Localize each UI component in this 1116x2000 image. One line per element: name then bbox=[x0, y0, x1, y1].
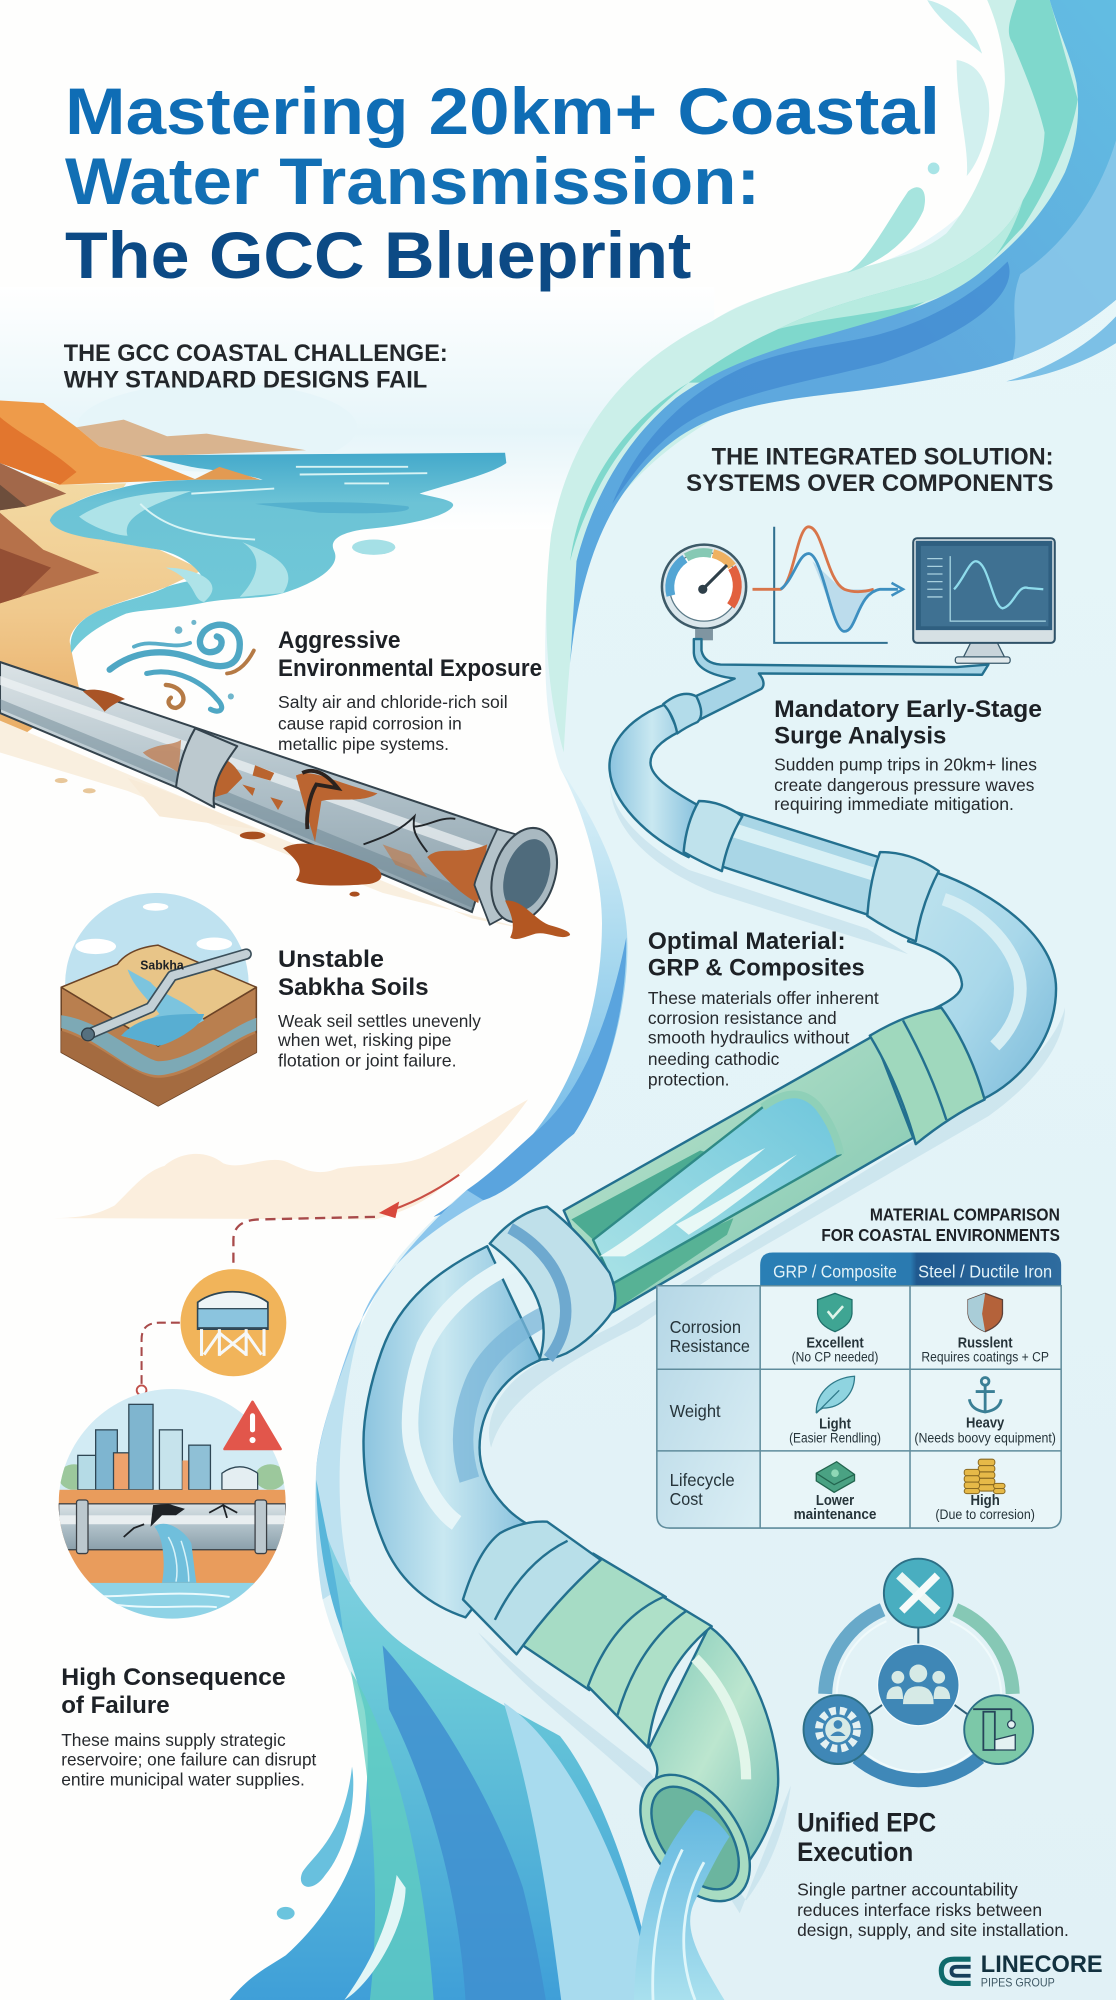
icon: feather bbox=[816, 1376, 855, 1413]
icon: monitor bbox=[913, 538, 1055, 663]
comparison table: Lower bbox=[816, 1493, 854, 1509]
node: team bbox=[877, 1644, 959, 1726]
text: unified EPC: Unified EPC bbox=[797, 1808, 936, 1838]
comparison table: High bbox=[970, 1493, 1000, 1509]
node: design bbox=[884, 1559, 953, 1628]
logo: PIPES GROUP bbox=[981, 1976, 1055, 1990]
pipe: green coupling two bbox=[588, 1597, 712, 1747]
pipe: small conduit bbox=[694, 639, 988, 719]
beige cloud and red arrow bbox=[51, 1099, 528, 1269]
pipe: first bend bbox=[609, 704, 704, 857]
title: Water Transmission: bbox=[65, 145, 760, 219]
text: optimal material: Optimal Material: bbox=[648, 928, 846, 954]
text: sabkha soils: Weak seil settles unevenly bbox=[278, 1011, 481, 1031]
pipe shadow bbox=[478, 784, 1065, 1913]
heading: challenge: WHY STANDARD DESIGNS FAIL bbox=[64, 367, 427, 394]
droplets bbox=[927, 0, 982, 54]
comparison table heading bbox=[821, 1205, 1060, 1245]
comparison table: Heavy bbox=[966, 1415, 1005, 1431]
heading: solution: THE INTEGRATED SOLUTION: bbox=[712, 443, 1054, 470]
text: optimal material: GRP & Composites bbox=[648, 955, 865, 981]
text: optimal material bbox=[648, 928, 879, 1089]
icon: pressure gauge bbox=[662, 545, 746, 640]
text: aggressive exposure: cause rapid corrosion in bbox=[278, 714, 462, 734]
text: high consequence bbox=[61, 1664, 316, 1790]
pipe: coupling two bbox=[684, 801, 742, 871]
icon: wind swirl bbox=[110, 620, 254, 711]
pipe: green strips and cutaway window with water bbox=[571, 1151, 714, 1240]
comparison table: maintenance bbox=[794, 1507, 876, 1523]
water ribbon: middle bbox=[315, 768, 628, 1599]
illustration: corroded pipe bbox=[0, 662, 570, 939]
text: optimal material: These materials offer inherent bbox=[648, 988, 879, 1008]
title bbox=[65, 75, 940, 293]
text: surge analysis: Sudden pump trips in 20km+ lines bbox=[774, 754, 1037, 774]
text: aggressive exposure bbox=[278, 627, 542, 754]
pipe: mouth ring bbox=[618, 1755, 772, 1921]
illustration: coastline bbox=[0, 383, 506, 753]
water ribbon: bottom bbox=[230, 1480, 657, 2000]
comparison table: Light bbox=[819, 1417, 851, 1433]
pipe: straight run bbox=[709, 812, 879, 915]
pipe: second bend bbox=[908, 872, 1056, 1099]
text: unified EPC: design, supply, and site installation. bbox=[797, 1920, 1069, 1940]
text: aggressive exposure: Environmental Exposure bbox=[278, 655, 542, 681]
pipe: coupling one bbox=[663, 694, 701, 733]
icon: city failure bbox=[59, 1389, 286, 1621]
text: sabkha soils bbox=[277, 946, 481, 1070]
comparison table heading: FOR COASTAL ENVIRONMENTS bbox=[821, 1225, 1060, 1245]
comparison table: Lifecycle bbox=[670, 1470, 735, 1490]
comparison table: (Easier Rendling) bbox=[789, 1431, 881, 1446]
icon: banknotes bbox=[816, 1462, 855, 1492]
text: unified EPC: Single partner accountability bbox=[797, 1879, 1018, 1899]
comparison table: GRP / Composite bbox=[773, 1261, 897, 1281]
logo: LINECORE bbox=[981, 1951, 1103, 1978]
pipe: coupling four bbox=[490, 1207, 615, 1360]
comparison table: Weight bbox=[670, 1401, 721, 1421]
text: high consequence: of Failure bbox=[61, 1692, 170, 1718]
text: high consequence: reservoire; one failure can disrupt bbox=[61, 1749, 316, 1769]
comparison table: Resistance bbox=[670, 1336, 750, 1356]
diagram: EPC ring bbox=[804, 1559, 1033, 1780]
text: high consequence: entire municipal water supplies. bbox=[61, 1770, 305, 1790]
heading: challenge bbox=[64, 340, 448, 394]
comparison table: Excellent bbox=[806, 1335, 864, 1351]
icon: reservoir bbox=[137, 1269, 286, 1395]
pipe: third bend bbox=[363, 1246, 541, 1617]
pipeline bbox=[363, 639, 1065, 1921]
comparison table heading: MATERIAL COMPARISON bbox=[870, 1205, 1060, 1225]
heading: solution bbox=[686, 443, 1054, 497]
pipe: coupling three bbox=[867, 852, 939, 941]
icon: sabkha block bbox=[61, 893, 256, 1106]
text: sabkha soils: Unstable bbox=[278, 946, 384, 972]
icon: coins bbox=[964, 1459, 1005, 1494]
water ribbon: top bbox=[546, 0, 1116, 753]
text: optimal material: protection. bbox=[648, 1069, 730, 1089]
text: unified EPC bbox=[797, 1808, 1069, 1940]
text: unified EPC: Execution bbox=[797, 1837, 913, 1867]
pipe: lower green run bbox=[523, 1554, 666, 1690]
text: optimal material: corrosion resistance and bbox=[648, 1008, 837, 1028]
text: sabkha soils: Sabkha Soils bbox=[278, 974, 429, 1000]
text: high consequence: High Consequence bbox=[61, 1664, 286, 1690]
text: aggressive exposure: metallic pipe systems. bbox=[278, 734, 449, 754]
chart: surge waveform bbox=[753, 527, 903, 643]
logo bbox=[941, 1951, 1103, 1990]
text: aggressive exposure: Salty air and chloride-rich soil bbox=[278, 692, 508, 712]
text: sabkha soils: when wet, risking pipe bbox=[277, 1030, 452, 1050]
text: optimal material: smooth hydraulics without bbox=[648, 1027, 850, 1047]
heading: solution: SYSTEMS OVER COMPONENTS bbox=[686, 470, 1054, 497]
pipe: outlet elbow bbox=[649, 1626, 778, 1865]
text: surge analysis bbox=[774, 696, 1042, 814]
text: optimal material: needing cathodic bbox=[648, 1049, 780, 1069]
text: unified EPC: reduces interface risks between bbox=[797, 1900, 1042, 1920]
node: installation bbox=[964, 1695, 1033, 1764]
text: aggressive exposure: Aggressive bbox=[278, 627, 400, 653]
comparison table: Steel / Ductile Iron bbox=[918, 1261, 1052, 1281]
comparison table: Requires coatings + CP bbox=[921, 1350, 1049, 1365]
title: The GCC Blueprint bbox=[65, 219, 691, 293]
text: surge analysis: create dangerous pressure waves bbox=[774, 775, 1035, 795]
icon: sabkha block: Sabkha bbox=[140, 957, 185, 972]
pipe: green coupling bbox=[870, 1008, 985, 1144]
comparison table: Russlent bbox=[958, 1335, 1013, 1351]
comparison table: (Due to corresion) bbox=[935, 1507, 1035, 1522]
heading: challenge: THE GCC COASTAL CHALLENGE: bbox=[64, 340, 448, 367]
icon: rusty shield bbox=[968, 1293, 1002, 1332]
text: sabkha soils: flotation or joint failure. bbox=[278, 1050, 457, 1070]
icon: anchor bbox=[969, 1378, 1001, 1412]
icon: green shield bbox=[818, 1293, 852, 1332]
comparison table bbox=[657, 1253, 1061, 1528]
pipe: green run bbox=[564, 1036, 913, 1314]
text: high consequence: These mains supply strategic bbox=[61, 1730, 286, 1750]
comparison table: Cost bbox=[670, 1489, 703, 1509]
comparison table: (No CP needed) bbox=[792, 1350, 878, 1365]
text: surge analysis: requiring immediate mitigation. bbox=[774, 794, 1014, 814]
node: supply bbox=[804, 1695, 872, 1764]
text: surge analysis: Mandatory Early-Stage bbox=[774, 696, 1042, 722]
water outflow bbox=[634, 1810, 730, 2000]
comparison table: Corrosion bbox=[670, 1317, 741, 1337]
text: surge analysis: Surge Analysis bbox=[774, 723, 946, 749]
pipe: coupling five bbox=[463, 1522, 601, 1654]
comparison table: (Needs boovy equipment) bbox=[914, 1431, 1056, 1446]
title: Mastering 20km+ Coastal bbox=[65, 75, 940, 149]
